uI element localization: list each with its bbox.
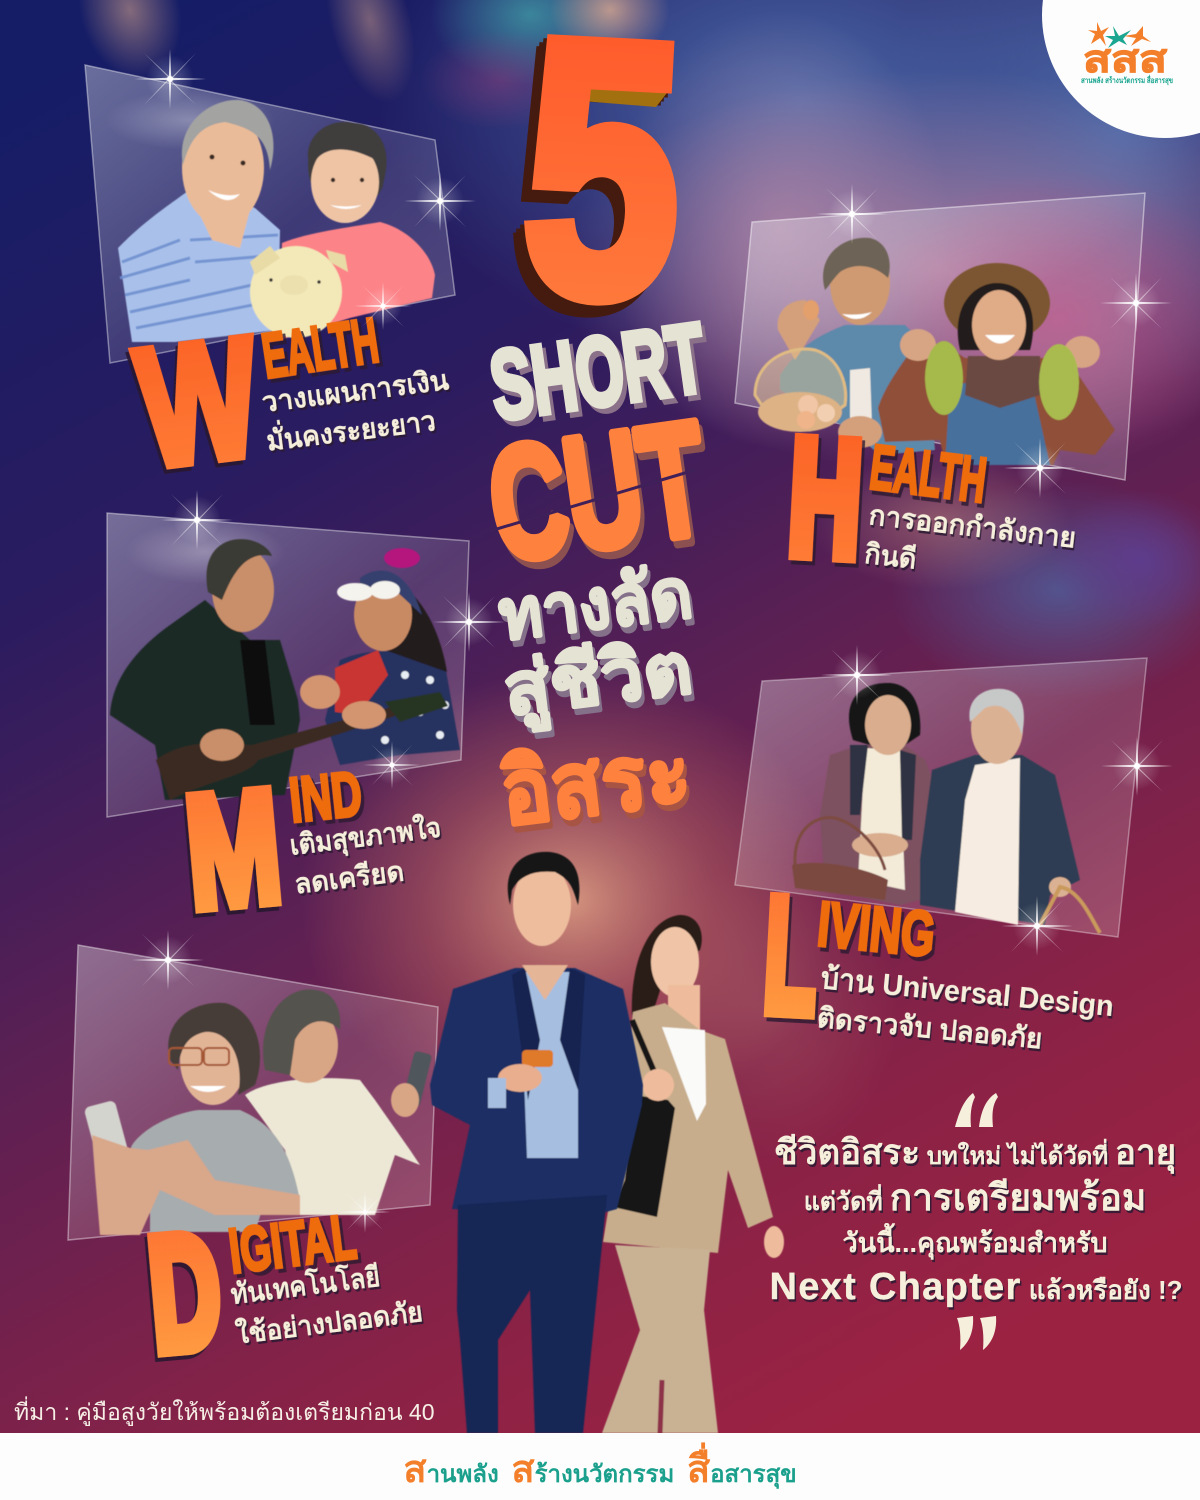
- photo: farmers with eggs and grapes: [755, 238, 1115, 465]
- word: su chiwit: สู่ชีวิต: [499, 628, 697, 736]
- photo: couple with baskets: [792, 683, 1100, 933]
- panel: mind: [107, 513, 469, 942]
- caption: health: การออกกำลังกาย: [867, 499, 1077, 554]
- opening quote mark: [955, 1093, 998, 1127]
- word: short: SHORT: [488, 307, 716, 446]
- wicker basket: [792, 818, 888, 900]
- word: short: SHORT: [484, 302, 712, 441]
- glass card: [85, 65, 455, 363]
- caption: digital: ทันเทคโนโลยี: [229, 1259, 382, 1310]
- quote text: วันนี้...คุณพร้อมสำหรับ: [842, 1222, 1108, 1260]
- word: short: [484, 302, 716, 446]
- caption: living: [816, 962, 1115, 1061]
- caption: mind: [288, 811, 447, 900]
- quote block: [769, 1093, 1183, 1350]
- source note: ที่มา : คู่มือสูงวัยให้พร้อมต้องเตรียมก่อน 40: [14, 1396, 435, 1426]
- photo: businesswoman walking: [602, 915, 784, 1433]
- heading: living: L: [760, 864, 822, 1048]
- heading: health: H: [785, 406, 866, 591]
- word: cut: CUT: [479, 387, 717, 595]
- heading: health: EALTH: [866, 432, 990, 516]
- caption: wealth: วางแผนการเงิน: [260, 364, 450, 418]
- logo tagline: สานพลัง สร้างนวัตกรรม สื่อสารสุข: [1081, 74, 1173, 86]
- caption: health: [863, 499, 1077, 592]
- caption: mind: เติมสุขภาพใจ: [288, 811, 443, 863]
- caption: digital: ใช้อย่างปลอดภัย: [234, 1295, 424, 1350]
- caption: living: บ้าน Universal Design: [819, 962, 1115, 1023]
- heading: wealth: [128, 302, 383, 503]
- caption: wealth: มั่นคงระยะยาว: [264, 400, 437, 457]
- caption: digital: [229, 1254, 424, 1350]
- closing quote mark: [957, 1316, 996, 1350]
- quote text: Next Chapter แล้วหรือยัง !?: [769, 1266, 1183, 1308]
- word: itsara: อิสระ: [498, 728, 699, 851]
- photo: women using smartphones: [84, 990, 432, 1235]
- glass card: [68, 945, 438, 1240]
- photo: businessman with phone: [430, 852, 643, 1433]
- heading: mind: M: [179, 755, 288, 942]
- guitar: [156, 692, 448, 800]
- piggy bank: [250, 246, 348, 338]
- caption: living: ติดราวจับ ปลอดภัย: [816, 1002, 1044, 1054]
- egg basket: [755, 349, 846, 432]
- caption: wealth: [260, 364, 455, 457]
- sparkles: [132, 49, 1173, 1233]
- panel: wealth: [85, 65, 455, 503]
- caption: health: กินดี: [863, 538, 918, 575]
- heading: living: IVING: [815, 889, 938, 970]
- photo: older couple with piggy bank: [118, 100, 435, 342]
- heading: digital: D: [142, 1199, 228, 1386]
- footer tagline: สานพลัง สร้างนวัตกรรม สื่อสารสุข: [403, 1442, 797, 1491]
- panel: digital: [68, 945, 438, 1386]
- word: cut: [479, 387, 721, 602]
- quote text: ชีวิตอิสระ บทใหม่ ไม่ได้วัดที่ อายุ: [774, 1133, 1176, 1174]
- footer bar: [0, 1433, 1200, 1500]
- glass card: [735, 193, 1145, 480]
- panel: living: [735, 658, 1147, 1061]
- heading: wealth: W: [128, 302, 269, 503]
- word: thang lat: ทางลัด: [494, 554, 696, 655]
- word: itsara: อิสระ: [495, 722, 696, 845]
- grapes: [925, 341, 963, 415]
- title: 5 short cut: [479, 0, 721, 851]
- heading: wealth: EALTH: [258, 305, 383, 392]
- logo wordmark: สสส: [1083, 39, 1168, 81]
- heading: digital: [142, 1199, 360, 1386]
- heading: health: [785, 406, 990, 591]
- word: su chiwit: สู่ชีวิต: [502, 634, 700, 742]
- panel: health: [735, 193, 1145, 592]
- logo badge: [1042, 0, 1200, 138]
- word: cut: CUT: [483, 394, 721, 602]
- photo: musicians with guitar: [110, 539, 460, 800]
- quote text: แต่วัดที่ การเตรียมพร้อม: [804, 1177, 1146, 1218]
- logo stars: [1088, 22, 1151, 48]
- heading: digital: IGITAL: [225, 1202, 360, 1287]
- word: thang lat: ทางลัด: [497, 560, 699, 661]
- heading: living: [760, 864, 938, 1048]
- shoulder bag: [613, 1095, 675, 1217]
- glass card: [107, 513, 469, 817]
- caption: mind: ลดเครียด: [293, 855, 406, 900]
- heading: mind: IND: [286, 759, 365, 836]
- quote text: [769, 1133, 1183, 1308]
- glass card: [735, 658, 1147, 937]
